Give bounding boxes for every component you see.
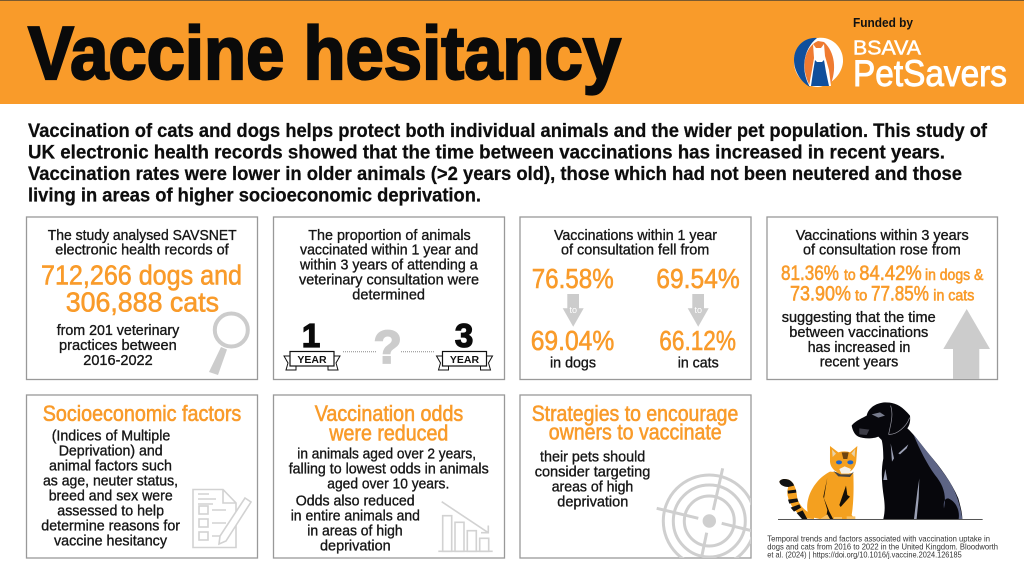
odds text: in entire animals and — [291, 507, 420, 524]
heading: owners to vaccinate — [549, 419, 722, 444]
funder logo — [794, 16, 1007, 94]
arrow: dogs down: to — [569, 305, 577, 315]
panel: vaccinations within 1 year — [520, 217, 751, 380]
factors text: animal factors such — [49, 458, 172, 475]
practices text: practices between — [59, 337, 177, 354]
proportion text: vaccinated within 1 year and — [300, 242, 478, 259]
arrow: cats down: to — [694, 305, 702, 315]
strategies text — [535, 449, 650, 511]
suggestion text: between vaccinations — [789, 324, 929, 341]
cat column: 66.12% — [659, 325, 736, 356]
icon: question mark with dotted links: ? — [374, 321, 402, 373]
odds text: falling to lowest odds in animals — [289, 460, 489, 477]
icon: target — [656, 468, 751, 558]
icon: 1 year ribbon: YEAR — [297, 354, 327, 366]
factors text: vaccine hesitancy — [54, 532, 167, 549]
3 year figures: 73.90% — [790, 283, 851, 306]
intro text: Vaccination rates were lower in older animals (>2 years old), those which had not been neutered and those — [28, 164, 962, 185]
3 year heading: of consultation rose from — [803, 242, 961, 259]
3 year figures: in cats — [933, 288, 975, 305]
heading: Strategies to encourage — [532, 401, 738, 426]
factors text: assessed to help — [57, 503, 164, 520]
dog column: 76.58% — [532, 263, 614, 294]
icon: question mark with dotted links — [343, 321, 434, 373]
panel: study data — [26, 217, 258, 380]
citation — [767, 534, 998, 560]
odds text: aged over 10 years. — [327, 475, 449, 492]
heading: Socioeconomic factors — [43, 401, 241, 426]
icon: 3 year ribbon: YEAR — [450, 354, 479, 366]
strategies text: areas of high — [552, 479, 633, 496]
icon: checklist and pencil — [193, 490, 251, 548]
icon: 1 year ribbon — [284, 317, 340, 370]
proportion text: within 3 years of attending a — [299, 257, 478, 274]
heading: Vaccination odds — [315, 401, 463, 426]
factors text: determine reasons for — [41, 517, 180, 534]
factors text — [41, 428, 180, 549]
intro text: living in areas of higher socioeconomic deprivation. — [28, 186, 481, 206]
animal counts — [41, 260, 242, 318]
icon: declining bar chart — [438, 502, 493, 551]
icon: 3 year ribbon — [436, 317, 492, 370]
panel: vaccinations within 3 years — [767, 217, 998, 380]
3 year figures: 84.42% — [859, 262, 922, 285]
ground line — [778, 518, 983, 521]
proportion text — [299, 227, 479, 303]
icon: 3 year ribbon: 3 — [455, 317, 473, 354]
intro text: UK electronic health records showed that the time between vaccinations has increased in recent years. — [28, 142, 945, 164]
1 year heading: Vaccinations within 1 year — [554, 227, 717, 244]
animal counts: 306,888 cats — [66, 287, 219, 318]
3 year figures: to — [855, 288, 867, 305]
practices text: from 201 veterinary — [57, 322, 180, 339]
funder logo: BSAVA — [853, 36, 921, 60]
illustration: cat and dog — [778, 402, 983, 520]
1 year heading — [554, 227, 717, 259]
odds text — [289, 445, 489, 554]
icon: magnifying glass — [209, 314, 248, 375]
cat column: in cats — [678, 354, 719, 371]
panel: vaccination odds — [274, 395, 504, 558]
citation: dogs and cats from 2016 to 2022 in the United Kingdom. Bloodworth — [767, 542, 998, 552]
cat — [779, 446, 857, 519]
practices text: 2016-2022 — [83, 352, 153, 369]
3 year figures: to — [844, 267, 856, 284]
3 year heading: Vaccinations within 3 years — [796, 227, 969, 244]
citation: Temporal trends and factors associated with vaccination uptake in — [767, 534, 990, 544]
odds text: in animals aged over 2 years, — [297, 445, 476, 462]
heading — [315, 401, 463, 446]
factors text: (Indices of Multiple — [52, 428, 170, 445]
icon: up arrow — [943, 309, 990, 379]
suggestion text: suggesting that the time — [782, 309, 936, 326]
heading — [532, 401, 738, 444]
dog column: in dogs — [550, 354, 596, 371]
factors text: as age, neuter status, — [43, 473, 178, 490]
odds text: Odds also reduced — [296, 492, 415, 509]
suggestion text — [782, 309, 936, 371]
3 year figures: 77.85% — [871, 283, 929, 306]
strategies text: their pets should — [540, 449, 645, 466]
3 year figures — [781, 262, 984, 306]
panel: strategies — [520, 395, 755, 567]
practices text — [57, 322, 180, 369]
3 year figures: in dogs & — [925, 267, 984, 284]
cat column — [656, 263, 740, 371]
study intro text — [48, 227, 237, 259]
factors text: breed and sex were — [49, 488, 173, 505]
cat column: 69.54% — [656, 263, 740, 294]
header banner — [0, 0, 1024, 104]
study intro text: The study analysed SAVSNET — [48, 227, 237, 244]
odds text: in areas of high — [307, 522, 403, 539]
intro text — [28, 121, 988, 206]
dog — [852, 402, 962, 519]
dog column — [531, 263, 614, 371]
1 year heading: of consultation fell from — [561, 242, 709, 259]
proportion text: determined — [352, 286, 425, 303]
strategies text: deprivation — [557, 494, 628, 511]
suggestion text: recent years — [820, 354, 899, 371]
suggestion text: has increased in — [808, 339, 910, 356]
3 year heading — [796, 227, 969, 259]
animal counts: 712,266 dogs and — [41, 260, 242, 291]
factors text: Deprivation) and — [59, 443, 163, 460]
odds text: deprivation — [320, 537, 391, 554]
strategies text: consider targeting — [535, 464, 650, 481]
panel: proportion vaccinated — [274, 217, 504, 380]
heading: were reduced — [328, 421, 448, 446]
citation: et al. (2024) | https://doi.org/10.1016/j.vaccine.2024.126185 — [767, 550, 962, 560]
icon: 1 year ribbon: 1 — [302, 317, 320, 354]
study intro text: electronic health records of — [55, 242, 229, 259]
proportion text: The proportion of animals — [308, 227, 471, 244]
proportion text: veterinary consultation were — [299, 272, 479, 289]
funder logo: Funded by — [853, 16, 913, 30]
funder logo: PetSavers — [853, 53, 1007, 94]
3 year figures: 81.36% — [781, 262, 839, 285]
dog column: 69.04% — [531, 325, 614, 356]
panel: socioeconomic factors — [26, 395, 258, 558]
title: Vaccine hesitancy — [28, 11, 621, 95]
intro text: Vaccination of cats and dogs helps protect both individual animals and the wider pet population. This study of — [28, 121, 988, 142]
